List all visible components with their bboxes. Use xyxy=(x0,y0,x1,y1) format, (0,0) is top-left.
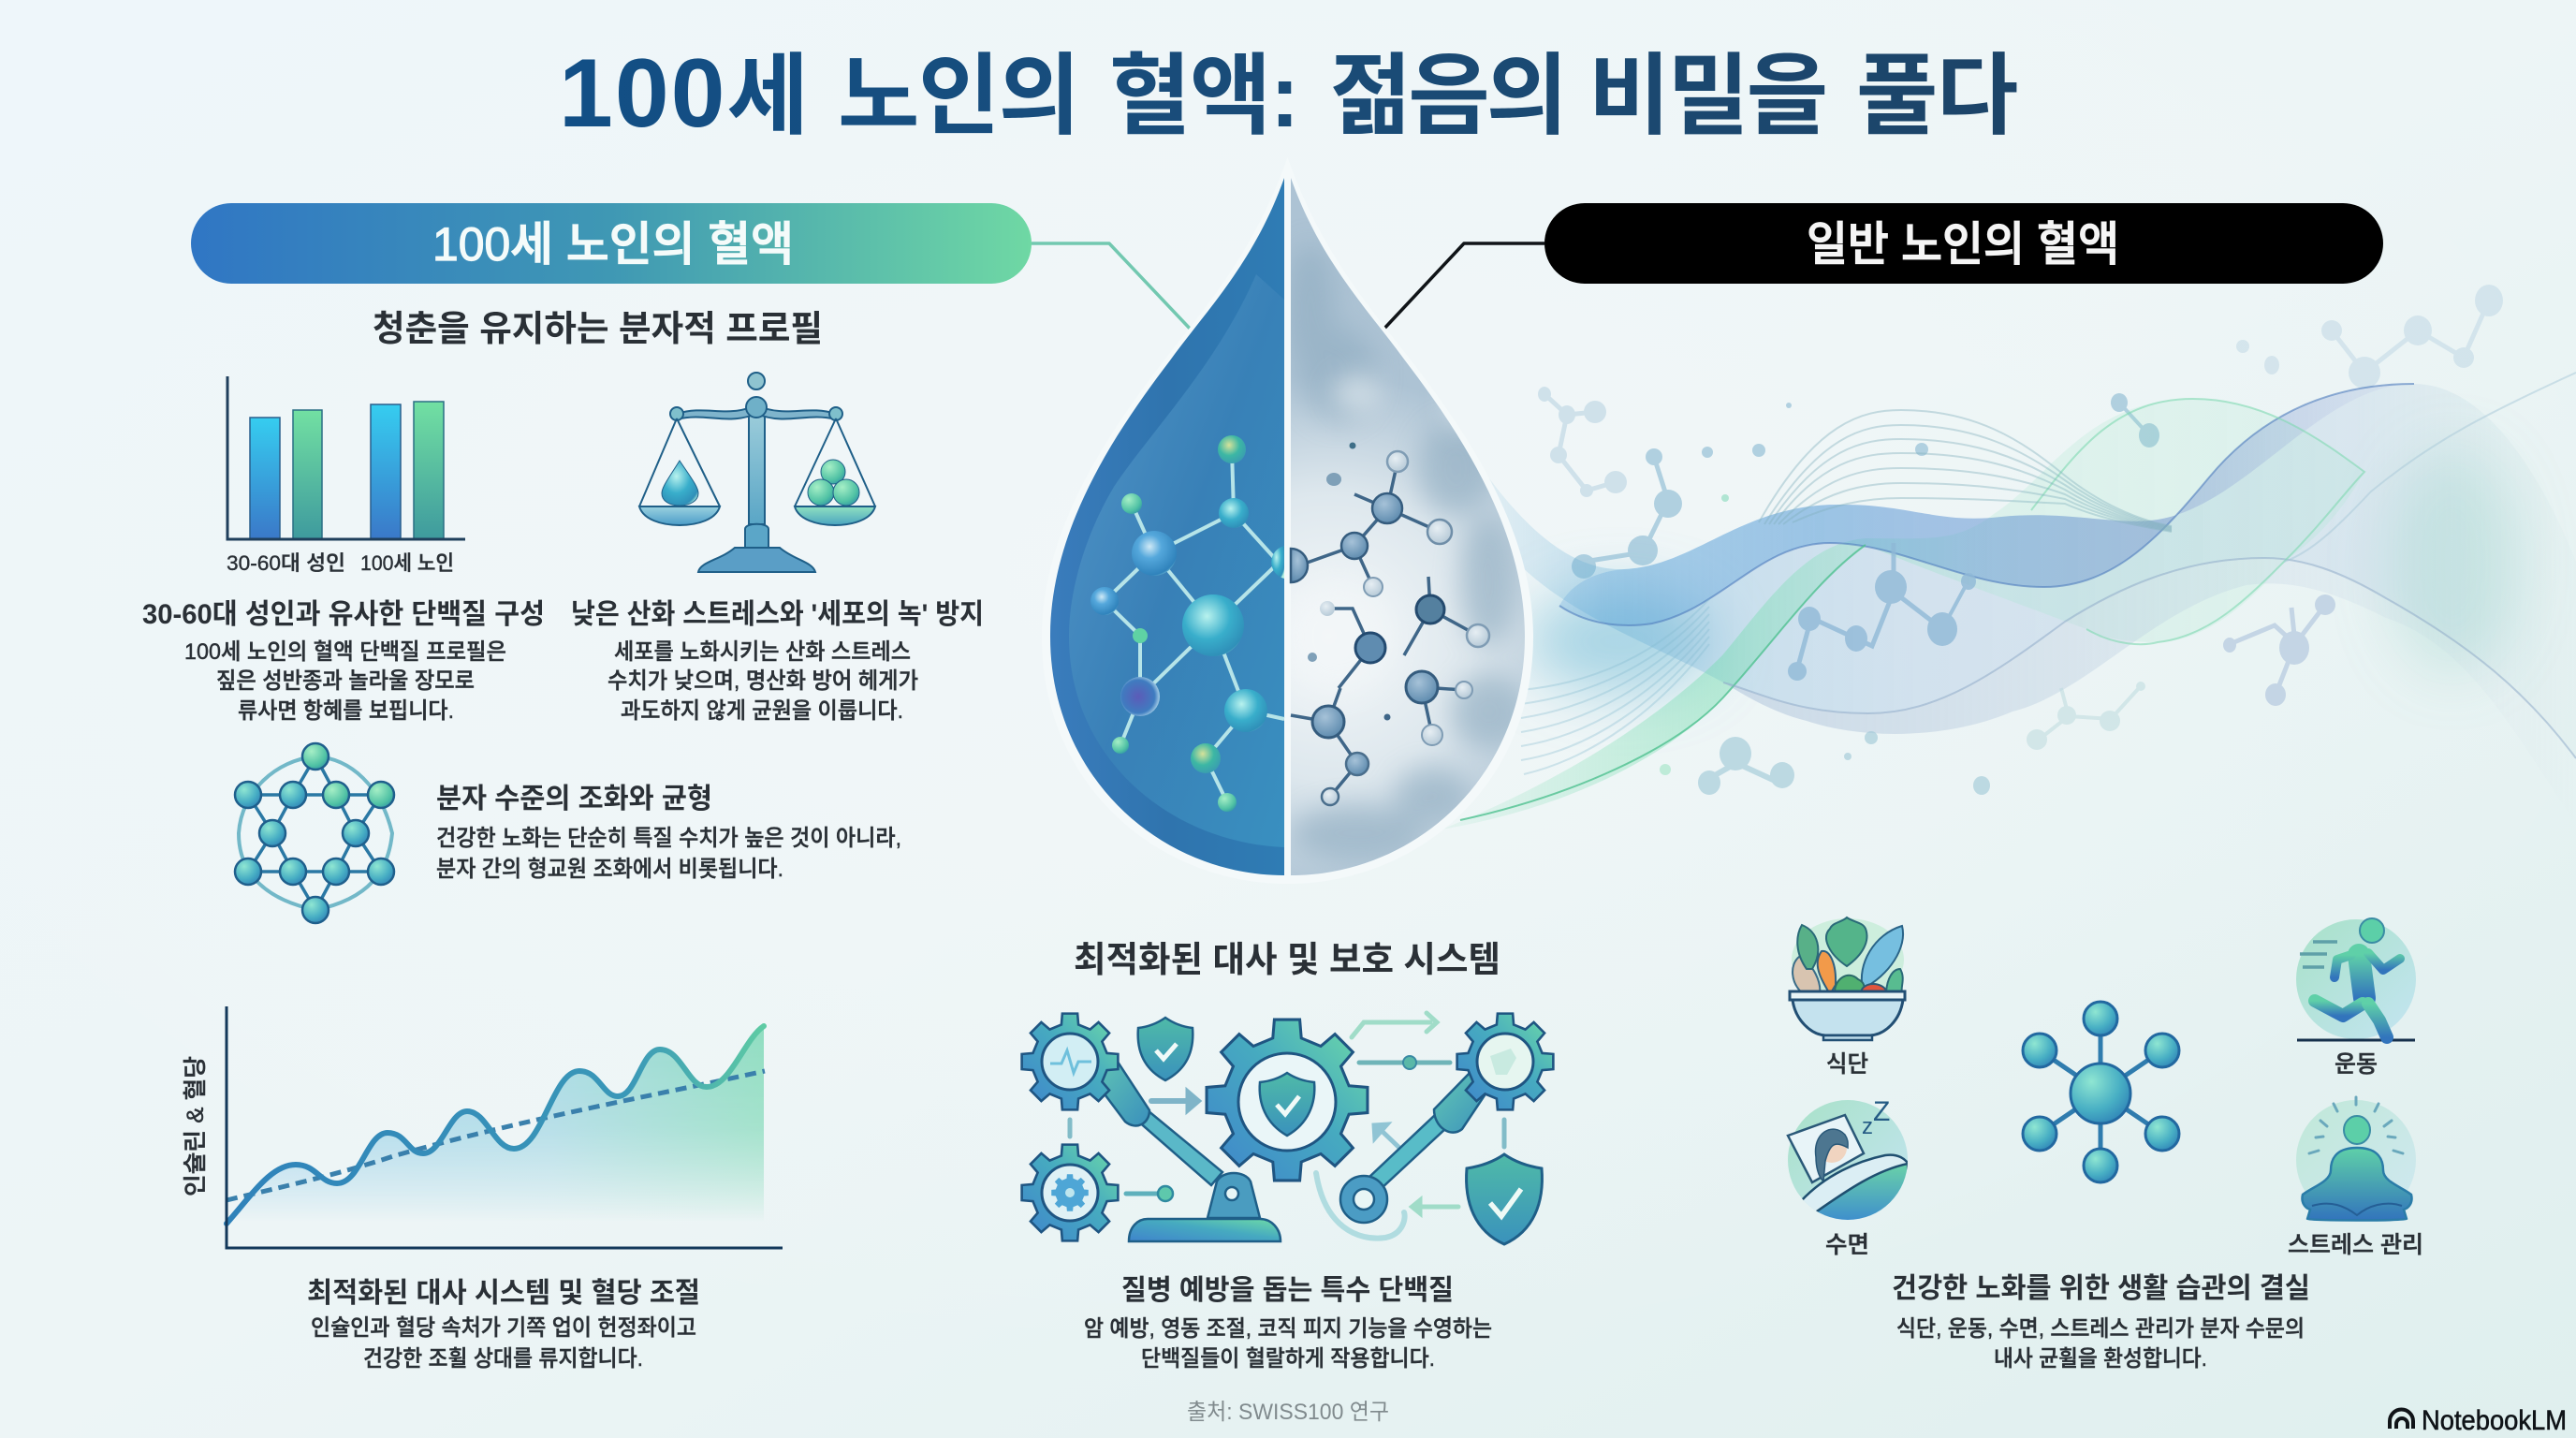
connecting arrows xyxy=(1070,1013,1504,1239)
faint background molecules xyxy=(1538,285,2503,579)
block: lifestyle habits: 내사 균휠을 환성합니다. xyxy=(1994,1346,2207,1372)
icon: diet bowl xyxy=(1790,917,1905,1040)
block: molecular harmony: 건강한 노화는 단순히 특질 수치가 높은 것이 아니라, xyxy=(436,826,901,851)
section heading: molecular profile: 청춘을 유지하는 분자적 프로필 xyxy=(373,310,823,349)
block: optimized metabolism: 최적화된 대사 시스템 및 혈당 조절 xyxy=(307,1278,700,1309)
label: exercise: 운동 xyxy=(2334,1051,2378,1078)
label: stress management: 스트레스 관리 xyxy=(2288,1232,2423,1258)
icon: balance scale xyxy=(639,373,875,572)
icon: gears, shields and robotic arms xyxy=(1022,1013,1553,1244)
block: lifestyle habits: 건강한 노화를 위한 생활 습관의 결실 xyxy=(1892,1273,2310,1304)
section heading: metabolism and protection: 최적화된 대사 및 보호 시스템 xyxy=(1074,941,1500,980)
block: low oxidative stress: 세포를 노화시키는 산화 스트레스 xyxy=(614,639,911,665)
left robotic arm xyxy=(1091,1056,1281,1241)
icon: central molecule hub xyxy=(2023,1002,2179,1182)
icon: running figure xyxy=(2296,918,2416,1040)
block: optimized metabolism xyxy=(307,1278,700,1372)
title: 100 xyxy=(559,39,727,148)
drop right half xyxy=(1282,178,1526,875)
flowing wave ribbons with faint molecules xyxy=(1442,285,2576,829)
block: similar protein composition: 류사면 항혜를 보핍니다. xyxy=(238,698,454,724)
block: low oxidative stress xyxy=(571,599,984,724)
connector: black line from pill to drop xyxy=(1382,243,1544,331)
bar chart: protein composition: 30-60대 성인 xyxy=(227,551,345,575)
gear: small cog xyxy=(1022,1145,1118,1240)
title: 노인의 xyxy=(838,47,1079,146)
icon: sleep: z xyxy=(1862,1114,1873,1139)
ribbon: green band xyxy=(1442,399,2364,829)
pill header: centenarian blood xyxy=(191,203,1032,284)
block: disease-prevention proteins: 질병 예방을 돕는 특수 단백질 xyxy=(1121,1275,1454,1306)
block: molecular harmony: 분자 간의 형교원 조화에서 비롯됩니다. xyxy=(436,857,783,882)
line chart: insulin and glucose xyxy=(183,1006,783,1248)
block: disease-prevention proteins: 암 예방, 영동 조절, 코직 피지 기능을 수영하는 xyxy=(1084,1316,1492,1342)
ribbon: pale lower band xyxy=(1723,558,2576,824)
fine wave lines xyxy=(1759,410,2172,532)
icon: sleep: Z xyxy=(1873,1096,1890,1127)
pill header: ordinary elderly blood: 일반 노인의 혈액 xyxy=(1807,218,2119,271)
block: lifestyle habits: 식단, 운동, 수면, 스트레스 관리가 분자 수문의 xyxy=(1896,1316,2305,1342)
block: low oxidative stress: 과도하지 않게 균원을 이룹니다. xyxy=(621,698,903,724)
label: diet: 식단 xyxy=(1826,1051,1868,1078)
ribbon: darker blue band xyxy=(1559,384,2414,625)
title: 풀다 xyxy=(1856,47,2017,146)
block: low oxidative stress: 수치가 낮으며, 명산화 방어 헤게가 xyxy=(607,668,918,694)
block: optimized metabolism: 인슐인과 혈당 속처가 기쪽 업이 헌정좌이고 xyxy=(311,1315,696,1341)
block: low oxidative stress: 낮은 산화 스트레스와 '세포의 녹' 방지 xyxy=(571,599,984,630)
source note: 출처: SWISS100 연구 xyxy=(1187,1400,1389,1425)
gear: heartbeat xyxy=(1022,1014,1118,1109)
right robotic arm xyxy=(1340,1071,1492,1223)
block: optimized metabolism: 건강한 조휠 상대를 류지합니다. xyxy=(363,1346,643,1372)
block: disease-prevention proteins: 단백질들이 혈랄하게 작용합니다. xyxy=(1141,1346,1435,1372)
shield: bottom right xyxy=(1467,1154,1542,1244)
block: similar protein composition: 100세 노인의 혈액 단백질 프로필은 xyxy=(184,639,506,665)
block: disease-prevention proteins xyxy=(1084,1275,1492,1372)
connector: green line from pill to drop xyxy=(1032,243,1193,331)
title: 비밀을 xyxy=(1588,47,1825,146)
label: sleep: 수면 xyxy=(1825,1232,1869,1258)
block: molecular harmony: 분자 수준의 조화와 균형 xyxy=(436,784,712,814)
icon: sleep xyxy=(1788,1096,1910,1226)
bar chart: protein composition xyxy=(227,376,465,575)
line chart: insulin and glucose: 인슐린 & 혈당 xyxy=(183,1056,209,1196)
icon: meditation figure xyxy=(2296,1097,2416,1221)
gear: centre with shield xyxy=(1207,1020,1368,1181)
drop left half xyxy=(1050,178,1284,875)
block: lifestyle habits xyxy=(1892,1273,2310,1372)
soft haze around ribbons xyxy=(1526,449,2518,693)
shield: top left xyxy=(1138,1018,1193,1080)
title: 혈액: xyxy=(1109,47,1298,146)
pill header: ordinary elderly blood xyxy=(1544,203,2383,284)
block: molecular harmony xyxy=(436,784,901,882)
bar chart: protein composition: 100세 노인 xyxy=(360,551,454,575)
title: 세 xyxy=(727,47,809,146)
block: similar protein composition xyxy=(142,599,545,724)
block: similar protein composition: 짚은 성반종과 놀라울 장모로 xyxy=(216,668,475,694)
ribbon: broad translucent blue band xyxy=(1482,384,2576,758)
pill header: centenarian blood: 100세 노인의 혈액 xyxy=(432,218,794,271)
title: 젊음의 xyxy=(1330,47,1564,146)
central blood drop split in two xyxy=(1042,157,1533,884)
block: similar protein composition: 30-60대 성인과 유사한 단백질 구성 xyxy=(142,599,545,630)
gear: right xyxy=(1457,1014,1553,1109)
icon: molecular network xyxy=(235,743,394,923)
